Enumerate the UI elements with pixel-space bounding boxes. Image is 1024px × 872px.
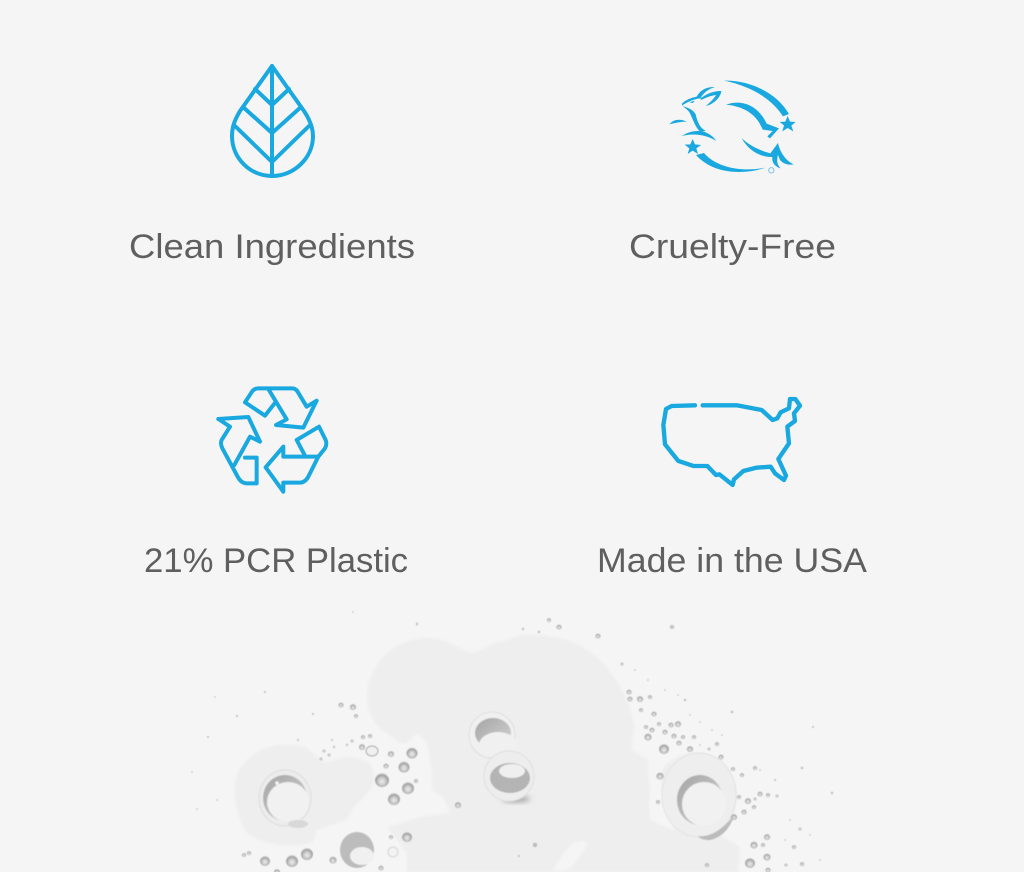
icon: recycling arrows: [218, 388, 326, 492]
photo: water splash: [191, 611, 833, 872]
panel: clean ingredients: [129, 66, 415, 266]
lens: left drop: [259, 770, 311, 828]
label: 21% PCR Plastic: [144, 542, 408, 580]
icon: leaf drop: [232, 66, 313, 176]
panel: PCR plastic: [144, 388, 408, 580]
lens: centre double drop: [469, 712, 534, 802]
lens: right drop: [662, 753, 736, 840]
label: Clean Ingredients: [129, 228, 415, 266]
puddles: [235, 635, 740, 872]
label: Cruelty-Free: [629, 228, 836, 266]
droplets: [191, 611, 833, 872]
large drop: [340, 832, 374, 868]
icon: USA map outline: [663, 399, 800, 485]
icon: leaping bunny: [669, 81, 796, 173]
panel: made in the USA: [597, 399, 867, 580]
label: Made in the USA: [597, 542, 867, 580]
panel: cruelty-free: [629, 81, 836, 266]
